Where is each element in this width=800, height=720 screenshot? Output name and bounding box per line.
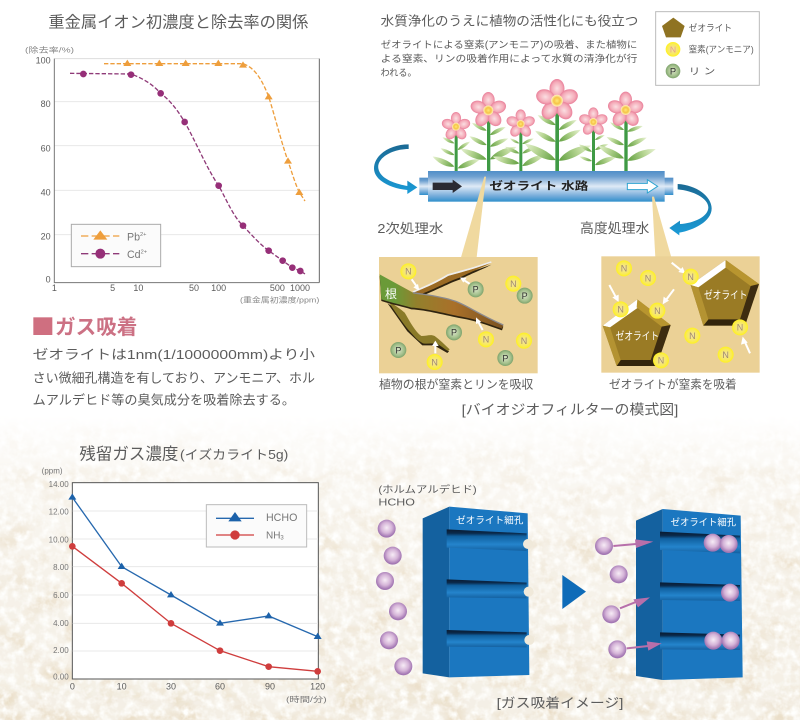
chart title: 残留ガス濃度 [79,446,178,464]
legend [656,12,759,85]
arrow: inflow [374,144,417,194]
nitrogen markers: N [722,350,729,360]
heading: ガス吸着 [55,316,137,339]
series: Cd2+ [70,71,305,274]
legend: 2+ [141,250,148,256]
legend: N [670,45,676,55]
zeolite pore block: before: ゼオライト細孔 [456,514,524,526]
x axis unit: (重金属初濃度/ppm) [240,295,320,305]
legend: P [670,67,676,77]
line chart: removal rate: 80 [41,99,51,109]
y axis unit: (除去率/%) [25,44,75,54]
nitrogen markers: N [617,305,624,315]
line chart: gas concentration: 6.00 [53,591,69,600]
nitrogen markers: N [621,264,627,274]
line chart: removal rate: 100 [211,283,226,293]
panel: residual gas chart [42,446,327,704]
description: よる窒素、リンの吸着作用によって水質の清浄化が行 [381,53,638,65]
panel: zeolite adsorbs [601,256,760,373]
zeolite lower: ゼオライト [616,330,659,342]
line chart: removal rate [36,55,319,293]
legend: 2+ [140,232,147,238]
panel: water purification [374,12,759,236]
line chart: removal rate: 40 [41,187,51,197]
line chart: gas concentration: 4.00 [53,619,69,628]
line chart: removal rate: 50 [189,283,199,293]
line chart: gas concentration: 0 [70,682,75,692]
nitrogen markers: N [654,306,661,316]
roots: 根 [385,287,397,301]
line chart: removal rate: 1 [52,283,57,293]
label: HCHO [378,483,477,508]
legend: HCHO [266,512,297,524]
nitrogen markers: N [689,331,696,341]
legend: 3 [280,535,284,541]
gas molecules: before [376,520,412,675]
zeolite pore block: after: ゼオライト細孔 [671,517,736,529]
legend: NH [266,531,280,542]
gas molecules: after [595,534,740,658]
nutrients: P [473,285,479,295]
chart title: (イズカライト5g) [180,447,288,462]
arrows: adsorption [613,539,662,651]
zeolite upper [691,260,759,326]
description: われる。 [381,68,417,79]
description: ゼオライトによる窒素(アンモニア)の吸着、また植物に [381,39,637,51]
water channel pipe [419,171,673,202]
line chart: gas concentration: 8.00 [53,563,69,572]
line chart: gas concentration: 30 [166,682,176,692]
nitrogen markers: N [737,323,743,333]
panel: gas adsorption text [33,316,315,407]
line chart: gas concentration: 10 [117,682,127,692]
absorption arrows [412,278,483,353]
line chart: gas concentration: 12.00 [49,508,69,517]
nutrients: P [522,291,528,301]
y axis unit: (ppm) [42,466,63,475]
body text [33,347,315,407]
nutrients: P [502,353,508,363]
nutrients: N [405,267,412,277]
caption: zeolite: ゼオライトが窒素を吸着 [609,377,737,391]
arrow: transition [562,575,586,609]
legend: ゼオライト [689,22,732,33]
line chart: removal rate: 1000 [290,283,310,293]
adsorption arrows [609,263,750,353]
zeolite upper: ゼオライト [704,290,747,302]
body text: ゼオライトは1nm(1/1000000mm)より小 [33,347,315,362]
caption: roots: 植物の根が窒素とリンを吸収 [379,377,534,391]
zeolite pore block: before [423,507,534,677]
nitrogen markers: N [658,356,664,366]
background: sand texture [0,415,800,720]
nitrogen markers: N [687,272,694,282]
legend: 窒素(アンモニア) [689,44,754,55]
label: HCHO: (ホルムアルデヒド) [378,483,477,496]
body text: ムアルデヒド等の臭気成分を吸着除去する。 [33,391,295,407]
line chart: removal rate: 20 [41,231,51,241]
callout beams [461,177,671,257]
x axis unit: (時間/分) [286,695,327,704]
series: HCHO [68,493,322,639]
line chart: gas concentration: 14.00 [49,480,69,489]
panel: gas adsorption image [376,483,743,710]
label: secondary treated water: 2次処理水 [377,221,443,236]
roots [380,262,503,353]
legend: Pb [127,231,140,243]
line chart: gas concentration: 60 [215,682,225,692]
nutrients [390,263,533,370]
chart title: 重金属イオン初濃度と除去率の関係 [48,14,308,32]
line chart: removal rate: 5 [110,283,115,293]
line chart: removal rate: 60 [41,143,51,153]
body text: さい微細孔構造を有しており、アンモニア、ホル [33,370,315,385]
figure caption: [バイオジオフィルターの模式図] [462,401,678,417]
line chart: gas concentration: 2.00 [53,646,69,655]
legend: リ ン [689,67,715,77]
nutrients: P [451,328,457,338]
line chart: removal rate: 100 [36,55,51,65]
nutrients: N [510,279,517,289]
nutrients: N [521,336,527,346]
nitrogen markers [613,260,748,368]
description [381,39,638,79]
nutrients: N [431,357,438,367]
heading: 水質浄化のうえに植物の活性化にも役立つ [381,12,638,28]
line chart: removal rate: 0 [46,275,51,285]
legend: Cd [127,249,141,261]
chart title [79,446,288,464]
arrow: outflow [669,184,712,235]
panel: heavy metal removal chart [25,14,320,305]
water channel pipe: ゼオライト 水路 [489,178,588,192]
label: advanced treated water: 高度処理水 [580,220,650,236]
figure caption: [ガス吸着イメージ] [497,694,623,710]
line chart: gas concentration: 90 [265,682,275,692]
zeolite pore block: after [636,509,743,680]
line chart: removal rate: 500 [270,283,285,293]
panel: roots absorb [379,257,538,373]
series: Pb2+ [104,60,305,201]
line chart: gas concentration: 0.00 [53,673,69,682]
line chart: removal rate: 10 [133,283,143,293]
nitrogen markers: N [645,273,651,283]
line chart: gas concentration: 10.00 [49,535,69,544]
line chart: gas concentration [49,480,325,692]
nutrients: N [483,335,489,345]
zeolite lower [603,299,671,366]
line chart: gas concentration: 120 [310,682,325,692]
panel: biogeo filter detail [379,177,760,417]
legend [206,505,307,547]
legend [71,224,161,267]
plants [431,79,657,173]
label: HCHO: HCHO [378,497,415,508]
nutrients: P [395,345,401,355]
series: NH3 [69,543,321,675]
